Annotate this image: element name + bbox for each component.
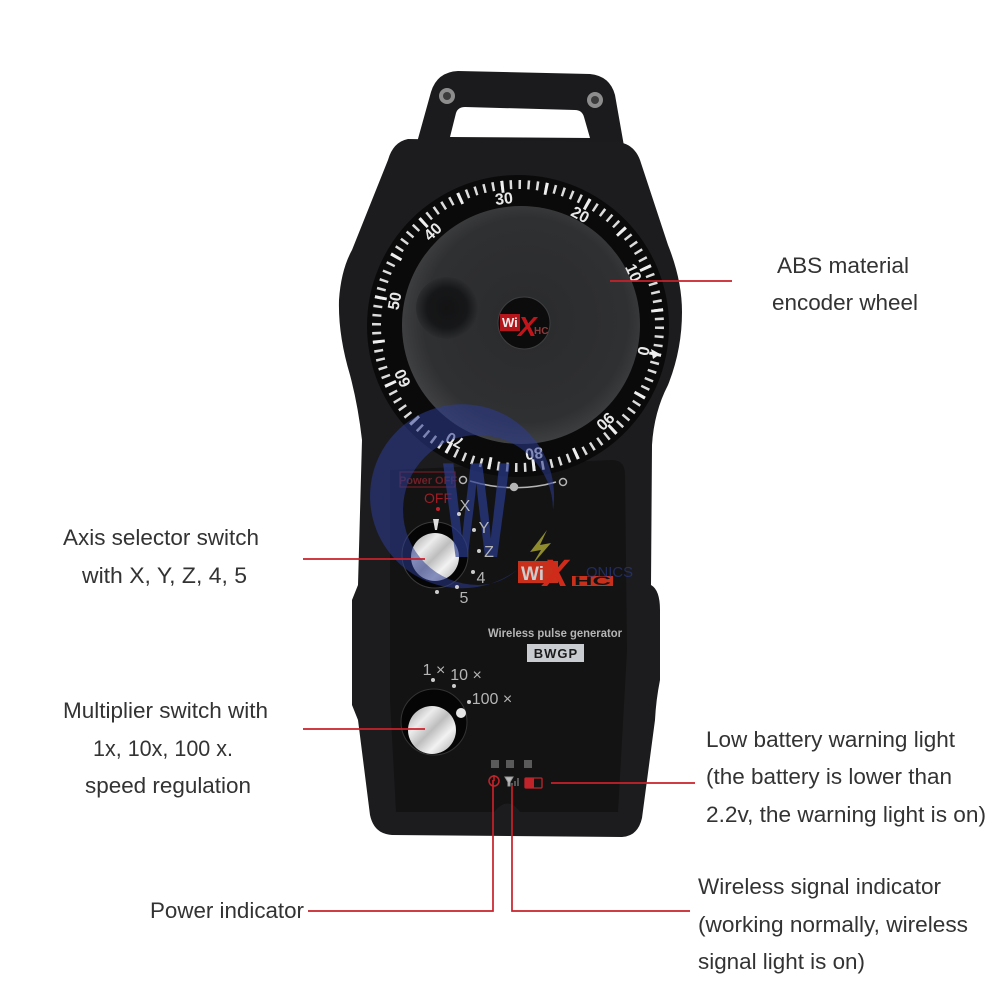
multiplier positions: 10 × [450, 667, 482, 684]
encoder wheel [402, 206, 640, 444]
brand logo: X [541, 553, 571, 595]
scale numbers: 50 [385, 291, 406, 311]
scale numbers [385, 190, 652, 462]
multiplier positions [423, 662, 512, 708]
centre logo: HC [534, 326, 548, 337]
callout: wireless signal: Wireless signal indicator [698, 874, 942, 899]
scale numbers: 40 [421, 220, 446, 245]
axis positions [435, 498, 494, 607]
callout: low battery: Low battery warning light [706, 727, 956, 752]
scale ring [367, 175, 669, 477]
callout: low battery: 2.2v, the warning light is on) [706, 802, 986, 827]
scale numbers: 20 [568, 204, 592, 227]
callout: low battery [706, 727, 986, 827]
housing [339, 139, 682, 837]
callout: multiplier: 1x, 10x, 100 x. [93, 736, 233, 761]
axis positions: X [460, 498, 471, 515]
axis positions: Z [484, 544, 494, 561]
callout: wireless signal [698, 874, 968, 974]
callout: multiplier: Multiplier switch with [63, 698, 268, 723]
callout: multiplier: speed regulation [85, 773, 251, 798]
callout: axis selector [63, 525, 259, 588]
minor ticks [352, 160, 684, 492]
model tag: BWGP [534, 646, 578, 661]
blue watermark [370, 404, 554, 588]
multiplier positions: 100 × [472, 691, 512, 708]
zero pointer [651, 349, 660, 359]
callout: encoder wheel: encoder wheel [772, 290, 918, 315]
model tag [527, 644, 584, 662]
direction arc [460, 476, 566, 490]
callout: power indicator: Power indicator [150, 898, 304, 923]
callout: axis selector: Axis selector switch [63, 525, 259, 550]
callout: encoder wheel: ABS material [777, 253, 909, 278]
callout: multiplier [63, 698, 268, 798]
axis positions: Y [479, 520, 490, 537]
off label: OFF [424, 490, 452, 506]
product name: Wireless pulse generator [488, 626, 622, 640]
blue watermark: W [443, 434, 510, 586]
axis knob [402, 519, 468, 588]
control panel [390, 460, 627, 812]
indicator leds [491, 760, 532, 768]
brand logo: ONICS [586, 564, 633, 581]
handle screw right [587, 92, 603, 108]
scale numbers: 90 [592, 408, 617, 433]
scale numbers: 60 [392, 366, 415, 389]
panel markings [370, 404, 633, 788]
finger dimple [416, 277, 478, 339]
device body [339, 71, 682, 837]
encoder dial [352, 160, 684, 492]
power icon [489, 775, 499, 786]
scale numbers: 30 [494, 190, 514, 209]
callout: wireless signal: signal light is on) [698, 949, 865, 974]
multiplier knob [401, 689, 467, 755]
brand logo: Wi [521, 564, 544, 585]
centre logo [498, 297, 550, 349]
scale numbers: 10 [621, 262, 644, 285]
scale numbers: 70 [443, 428, 467, 451]
axis positions: 5 [460, 590, 469, 607]
axis positions: 4 [477, 570, 486, 587]
brand logo [518, 553, 633, 595]
multiplier positions: 1 × [423, 662, 445, 679]
callout: low battery: (the battery is lower than [706, 764, 952, 789]
handle screw left [439, 88, 455, 104]
carry handle [416, 71, 624, 146]
callout: encoder wheel [772, 253, 918, 315]
centre logo: Wi [502, 315, 518, 330]
centre logo: X [516, 311, 539, 342]
battery icon [525, 778, 542, 788]
signal icon [505, 777, 518, 786]
scale numbers: 80 [524, 443, 544, 462]
power off box: Power OFF [399, 475, 457, 487]
brand logo: HC [574, 574, 612, 588]
callout: wireless signal: (working normally, wireless [698, 912, 968, 937]
scale numbers: 0 [633, 345, 652, 357]
major ticks [354, 162, 682, 490]
leader lines [303, 281, 732, 911]
callout: axis selector: with X, Y, Z, 4, 5 [81, 563, 247, 588]
lightning bolt [530, 530, 551, 565]
